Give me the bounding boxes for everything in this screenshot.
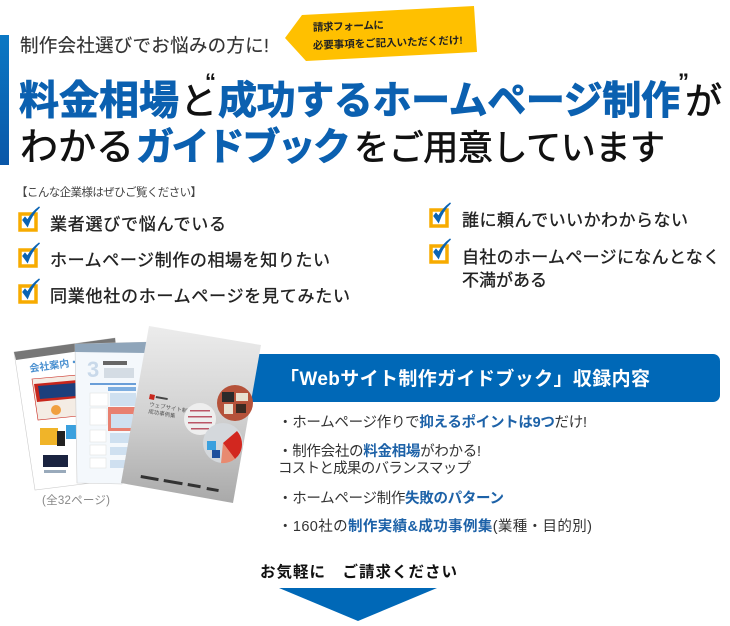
checklist left: 業者選びで悩んでいる	[50, 215, 226, 234]
contents list	[278, 413, 592, 535]
contents banner	[250, 354, 720, 402]
lead text: 制作会社選びでお悩みの方に!	[20, 35, 269, 56]
audience intro: 【こんな企業様はぜひご覧ください】	[16, 185, 202, 199]
call to action: お気軽に ご請求ください	[260, 562, 457, 581]
contents list: ・ホームページ作りで抑えるポイントは9つだけ!	[278, 413, 587, 431]
title: ガイドブック	[136, 126, 351, 169]
checklist right: 不満がある	[462, 271, 547, 290]
checklist right: 誰に頼んでいいかわからない	[462, 211, 688, 230]
front cover: 成功事例集	[148, 407, 177, 420]
checklist left: 同業他社のホームページを見てみたい	[50, 287, 350, 306]
title: ”	[678, 69, 689, 94]
title: が	[685, 81, 722, 122]
arrow	[279, 588, 437, 621]
guidebook image	[14, 326, 261, 503]
contents list: ・ホームページ制作失敗のパターン	[278, 489, 504, 507]
back page: 会社案内・商品紹介	[29, 350, 120, 375]
middle page	[75, 342, 150, 484]
title: 料金相場	[19, 79, 179, 123]
contents list: コストと成果のバランスマップ	[278, 460, 472, 477]
page count caption: (全32ページ)	[42, 493, 110, 507]
callout: request form	[285, 6, 477, 61]
title: わかる	[20, 127, 134, 169]
middle page: 3	[87, 357, 99, 382]
checklist left	[20, 207, 350, 306]
front cover: ウェブサイト制作	[149, 400, 194, 416]
callout: request form: 必要事項をご記入いただくだけ!	[313, 34, 463, 52]
title: “	[205, 69, 216, 94]
contents list: ・160社の制作実績&成功事例集(業種・目的別)	[278, 517, 592, 535]
front cover	[121, 326, 261, 503]
checklist right: 自社のホームページになんとなく	[462, 248, 720, 267]
contents list: ・制作会社の料金相場がわかる!	[278, 442, 481, 460]
checklist right	[431, 203, 720, 290]
title: をご用意しています	[354, 129, 665, 168]
title	[19, 69, 722, 169]
back page	[14, 338, 120, 490]
accent bar	[0, 35, 9, 165]
title: と	[180, 81, 217, 122]
checklist left: ホームページ制作の相場を知りたい	[50, 251, 330, 270]
callout: request form: 請求フォームに	[313, 19, 384, 34]
contents banner: 「Webサイト制作ガイドブック」収録内容	[280, 367, 650, 390]
title: 成功するホームページ制作	[218, 80, 680, 123]
